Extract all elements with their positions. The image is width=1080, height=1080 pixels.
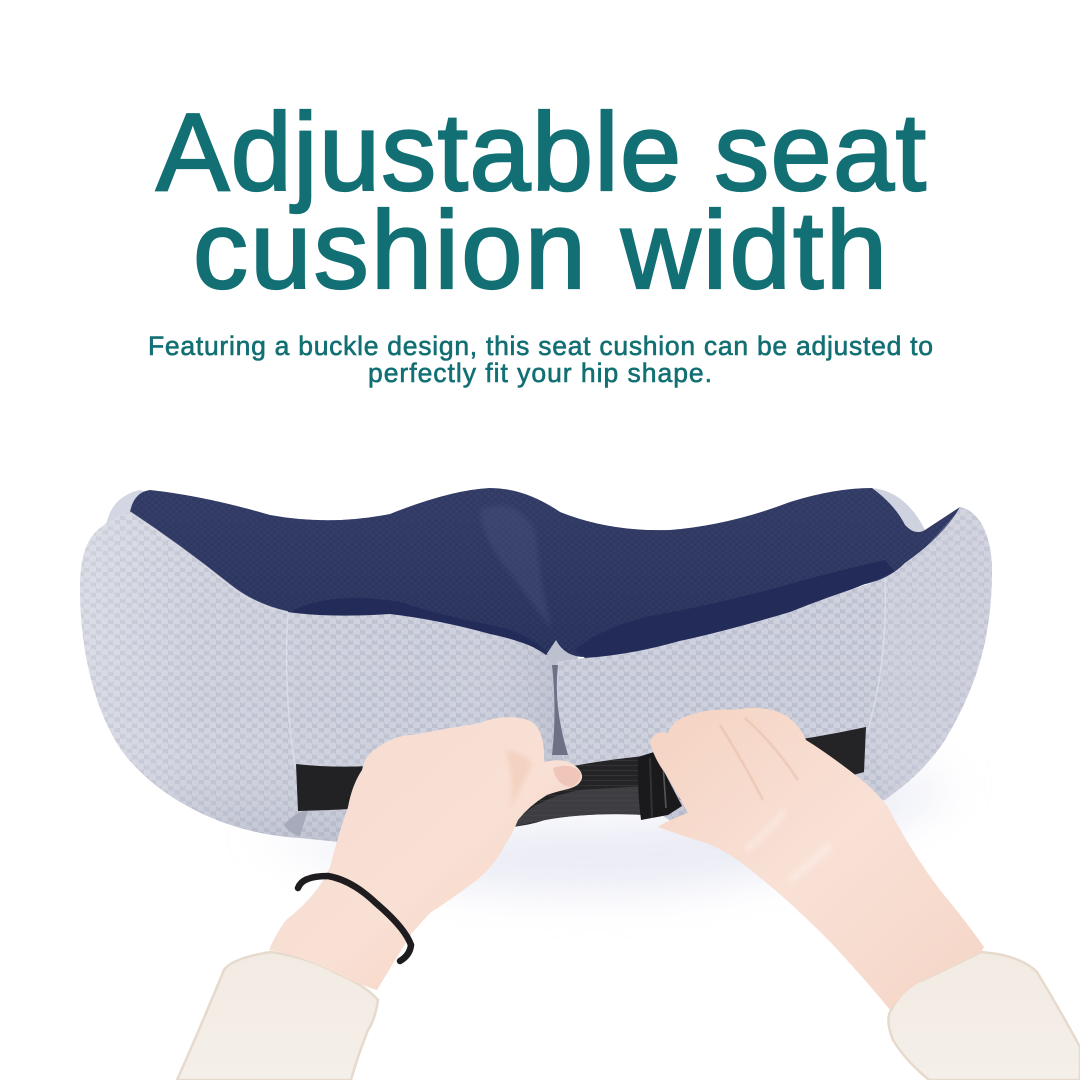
centre base behind seam — [530, 630, 590, 775]
strap left section — [296, 764, 372, 811]
front left lip — [288, 598, 548, 655]
front right lip — [575, 560, 895, 658]
title — [156, 91, 926, 312]
cushion rear left wing — [106, 490, 170, 530]
centre gap — [552, 665, 568, 755]
right finger creases — [720, 718, 798, 800]
right hand — [650, 708, 984, 1010]
left hand knuckle shading — [505, 750, 532, 810]
cushion seams — [130, 512, 885, 765]
title: cushion width — [193, 189, 887, 312]
centre ridge highlight — [480, 506, 552, 630]
product photo: seat cushion — [80, 488, 992, 850]
floor shadow — [250, 780, 960, 891]
navy seat surface — [130, 488, 960, 657]
adjustment strap — [296, 727, 866, 827]
cushion grey body right — [555, 507, 992, 840]
fabric wrinkle — [284, 810, 308, 836]
subtitle: Featuring a buckle design, this seat cushion can be adjusted to — [148, 331, 933, 361]
subtitle: perfectly fit your hip shape. — [368, 358, 712, 388]
left hand — [269, 717, 582, 990]
buckle — [638, 752, 682, 820]
right sleeve — [888, 952, 1080, 1080]
hair tie bracelet — [298, 876, 411, 961]
strap middle section — [512, 756, 645, 827]
cushion rear right wing — [870, 488, 925, 540]
cushion grey body left — [80, 512, 554, 850]
left thumbnail — [553, 766, 581, 787]
right hand tendon highlight — [745, 810, 830, 880]
title: Adjustable seat — [156, 91, 926, 214]
strap right section — [660, 727, 866, 800]
subtitle — [148, 331, 933, 388]
left sleeve — [177, 952, 378, 1080]
